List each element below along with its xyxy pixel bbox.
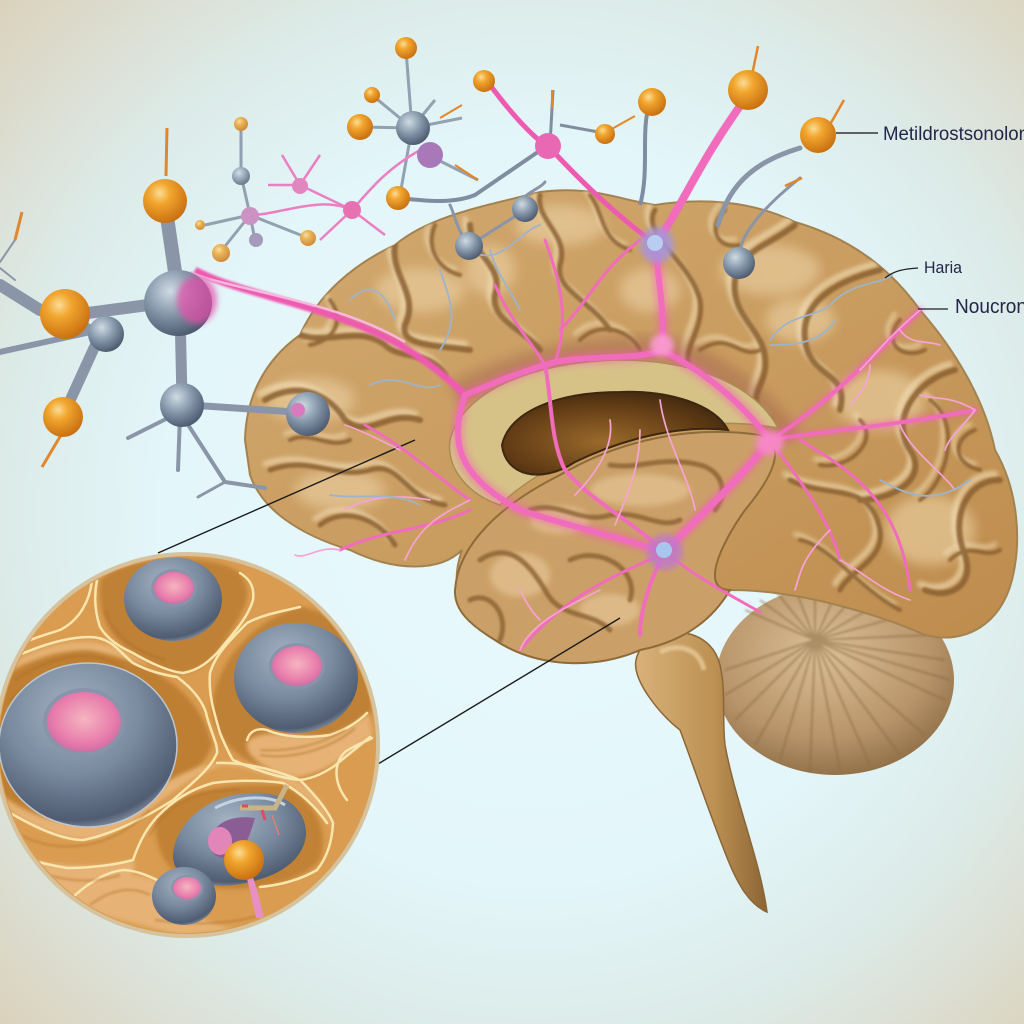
label: Haria: Haria [924,258,963,277]
upper left molecule network [0,128,465,497]
glow [458,245,975,552]
orange balls [143,179,187,223]
cerebellum [716,585,954,775]
dendrite trunks [340,95,975,650]
thin light dendrites [295,310,975,650]
neuron cell bodies [640,227,784,570]
brainstem [636,632,767,912]
label: Noucron [918,296,1024,318]
right molecules on brain [450,46,844,279]
molecule nodes [144,270,212,336]
label: Haria [885,258,963,278]
small distant molecules [195,37,666,262]
corpus callosum [450,360,778,505]
neuron network [295,95,975,650]
damaged cell [173,785,306,886]
ligand ball [224,840,264,918]
top cell [124,557,222,641]
tissue pockets [0,558,372,889]
right cell [234,623,358,733]
brain [245,189,1017,663]
inset magnified circle [0,554,378,936]
shading around the fibre ring [455,349,790,440]
molecule bonds [0,210,295,497]
temporal lobe [455,432,775,663]
lighter bands [0,642,372,935]
cream fold lines [0,573,372,900]
connector lines [158,440,620,764]
small cell [152,867,216,925]
gyri shading [265,205,975,565]
large cell [0,663,177,827]
